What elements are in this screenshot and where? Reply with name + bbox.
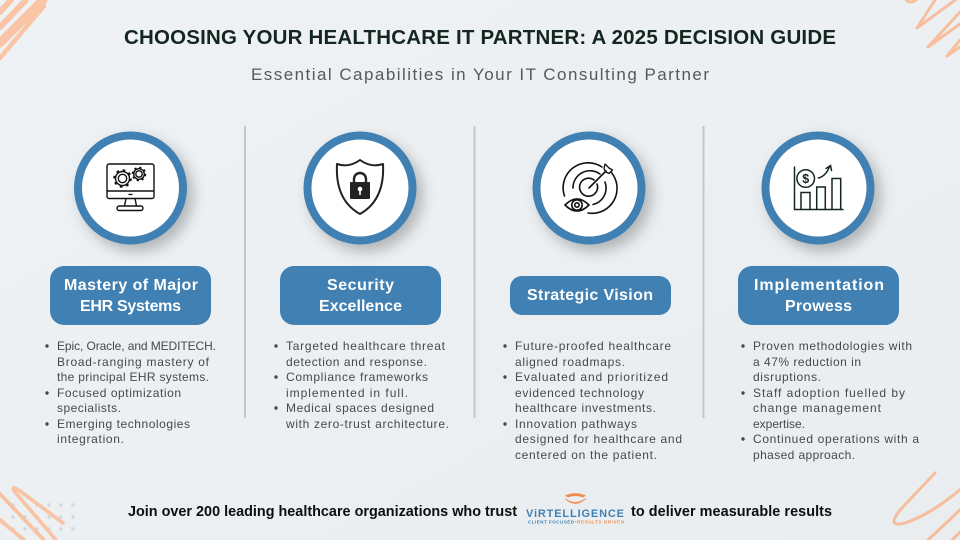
logo: Virtelligence: CLIENT FOCUSED xyxy=(528,520,575,524)
heading pill: Strategic Vision xyxy=(527,287,653,304)
icon: growth bar chart with dollar coin xyxy=(766,136,870,240)
bullet list: Innovation pathways xyxy=(515,417,637,431)
bullet list: Targeted healthcare threat xyxy=(286,339,446,353)
bullet list xyxy=(45,339,216,446)
decoration: bottom-left scribble xyxy=(0,488,63,540)
heading pill: Mastery of Major xyxy=(64,277,198,294)
bullet list: expertise. xyxy=(753,417,805,431)
bullet list: Broad-ranging mastery of xyxy=(57,355,210,369)
heading pill: Excellence xyxy=(319,298,402,315)
bullet list: disruptions. xyxy=(753,370,821,384)
bullet list: implemented in full. xyxy=(286,386,408,400)
bullet list: Staff adoption fuelled by xyxy=(753,386,905,400)
column dividers xyxy=(245,126,704,418)
bullet list: Proven methodologies with xyxy=(753,339,912,353)
heading pill: EHR Systems xyxy=(80,298,181,315)
heading pill xyxy=(280,266,441,325)
bullet list xyxy=(274,339,449,431)
bullet list: Continued operations with a xyxy=(753,432,919,446)
bullet list: with zero-trust architecture. xyxy=(285,417,449,431)
heading pill xyxy=(738,266,899,325)
title: CHOOSING YOUR HEALTHCARE IT PARTNER: A 2025 DECISION GUIDE xyxy=(124,26,836,49)
bullet list: the principal EHR systems. xyxy=(57,370,209,384)
bullet list: a 47% reduction in xyxy=(753,355,861,369)
bullet list: Epic, Oracle, and MEDITECH. xyxy=(57,339,216,353)
heading pill: Prowess xyxy=(785,298,852,315)
decoration: bottom-left dots xyxy=(11,503,75,531)
decoration: top-right scribble xyxy=(906,0,960,56)
panel: Mastery of Major EHR Systems xyxy=(45,136,216,446)
heading pill xyxy=(510,276,671,315)
bullet list: healthcare investments. xyxy=(515,401,656,415)
icon: growth bar chart with dollar coin: $ xyxy=(802,172,809,186)
bullet list: evidenced technology xyxy=(515,386,644,400)
logo: Virtelligence: ViRTELLIGENCE xyxy=(526,508,624,520)
bullet list: specialists. xyxy=(57,401,121,415)
heading pill: Implementation xyxy=(754,277,884,294)
footer call to action: to deliver measurable results xyxy=(631,504,832,520)
bullet list: detection and response. xyxy=(286,355,427,369)
footer call to action: Join over 200 leading healthcare organizations who trust xyxy=(128,504,517,520)
bullet list: designed for healthcare and xyxy=(515,432,682,446)
decoration: top-left scribble xyxy=(0,0,44,58)
subtitle: Essential Capabilities in Your IT Consulting Partner xyxy=(251,65,709,84)
bullet list: Emerging technologies xyxy=(57,417,190,431)
panel: Implementation Prowess xyxy=(738,136,919,462)
panel: Security Excellence xyxy=(274,136,449,431)
bullet list: Medical spaces designed xyxy=(286,401,434,415)
bullet list: centered on the patient. xyxy=(515,448,657,462)
bullet list: phased approach. xyxy=(753,448,855,462)
bullet list xyxy=(503,339,682,462)
bullet list: change management xyxy=(753,401,882,415)
icon: monitor with gears xyxy=(78,136,183,240)
icon: shield with padlock xyxy=(308,136,412,240)
logo: Virtelligence xyxy=(526,493,624,524)
heading pill: Security xyxy=(327,277,394,294)
bullet list: Evaluated and prioritized xyxy=(515,370,668,384)
bullet list: Focused optimization xyxy=(57,386,181,400)
bullet list: aligned roadmaps. xyxy=(515,355,625,369)
bullet list: Future-proofed healthcare xyxy=(515,339,671,353)
decoration: bottom-right scribble xyxy=(894,473,960,540)
icon: target with arrow and eye xyxy=(536,136,642,240)
bullet list: Compliance frameworks xyxy=(286,370,428,384)
logo: Virtelligence: •RESULTS DRIVEN xyxy=(575,520,624,524)
footer call to action xyxy=(128,504,832,520)
bullet list: integration. xyxy=(57,432,124,446)
bullet list xyxy=(741,339,919,462)
panel: Strategic Vision xyxy=(503,136,682,462)
heading pill xyxy=(50,266,211,325)
